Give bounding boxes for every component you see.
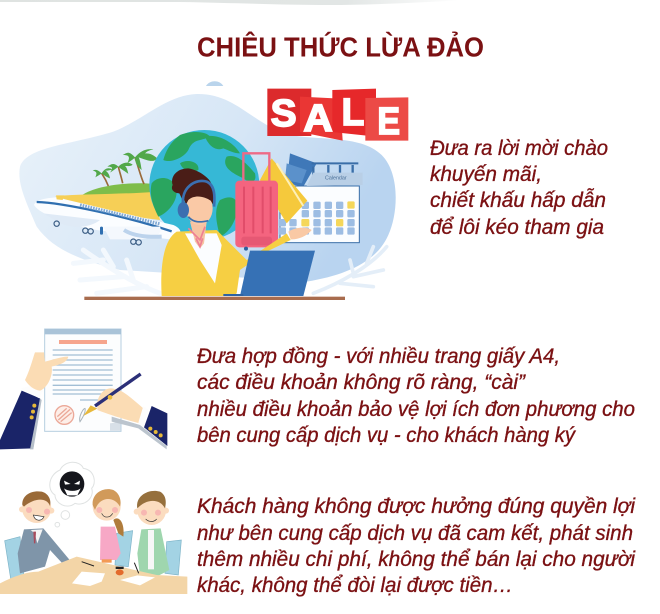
text block 1: promotional offer: chiết khấu hấp dẫn — [430, 189, 606, 212]
text block 3: lost rights — [197, 495, 636, 597]
pen — [83, 374, 141, 416]
leaves right — [313, 247, 387, 293]
sale banner: A — [303, 97, 333, 140]
sale banner: E — [377, 100, 400, 143]
airplane — [34, 195, 180, 245]
cloud — [206, 81, 223, 86]
desk — [84, 297, 345, 300]
man in green — [134, 491, 169, 577]
left hand and sleeve — [0, 352, 68, 449]
text block 1: promotional offer: để lôi kéo tham gia — [430, 216, 604, 239]
text block 2: contract clauses: nhiều điều khoản bảo vệ lợi ích đơn phương cho — [197, 398, 635, 421]
calendar — [279, 153, 363, 243]
text block 1: promotional offer: khuyến mãi, — [430, 163, 542, 186]
text block 3: lost rights: thêm nhiều chi phí, không thể bán lại cho người — [197, 548, 636, 571]
credit card — [260, 158, 307, 223]
top decorative bar — [0, 0, 462, 5]
text block 1: promotional offer: Đưa ra lời mời chào — [430, 137, 608, 160]
illustration: meeting with customers — [0, 462, 187, 594]
document — [45, 329, 121, 431]
leaves left — [73, 250, 160, 293]
agent — [161, 168, 312, 296]
laptop — [240, 251, 315, 296]
illustration: travel sale agent — [19, 81, 408, 300]
chairs — [5, 531, 181, 579]
island — [82, 183, 157, 197]
illustration: signing contract — [0, 329, 167, 449]
table — [0, 557, 187, 594]
sale banner — [267, 89, 408, 143]
text block 2: contract clauses — [197, 345, 635, 447]
palm trees — [102, 157, 144, 186]
right hand and sleeve — [97, 388, 167, 449]
man in suit — [18, 491, 77, 573]
text block 3: lost rights: như bên cung cấp dịch vụ đã cam kết, phát sinh — [197, 522, 633, 545]
globe — [149, 130, 259, 240]
suitcase — [235, 153, 278, 251]
text block 2: contract clauses: bên cung cấp dịch vụ - cho khách hàng ký — [197, 424, 576, 447]
text block 2: contract clauses: Đưa hợp đồng - với nhiều trang giấy A4, — [197, 345, 560, 368]
woman — [93, 489, 124, 563]
text block 1: promotional offer — [430, 137, 608, 239]
thought bubble — [50, 462, 94, 527]
text block 3: lost rights: khác, không thể đòi lại được tiền… — [197, 574, 513, 597]
text block 2: contract clauses: các điều khoản không rõ ràng, “cài” — [197, 371, 526, 394]
sale banner: S — [271, 92, 297, 135]
background blob — [19, 94, 396, 282]
sale banner: L — [342, 91, 364, 134]
text block 3: lost rights: Khách hàng không được hưởng đúng quyền lợi — [197, 495, 636, 518]
calendar: Calendar — [325, 175, 347, 181]
title: CHIÊU THỨC LỪA ĐẢO — [197, 30, 484, 62]
